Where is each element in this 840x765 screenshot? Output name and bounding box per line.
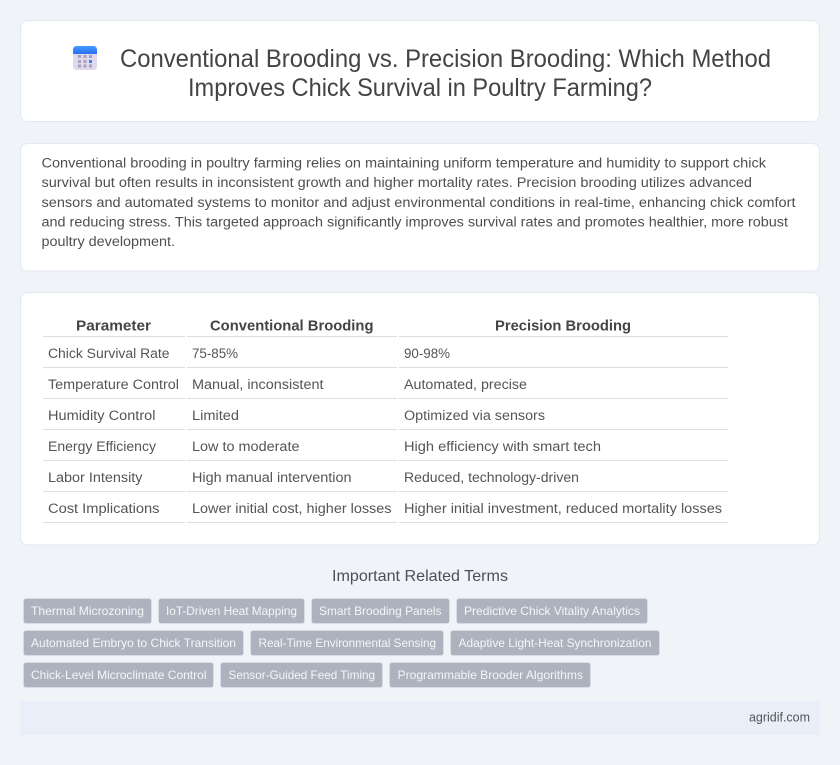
panel: introduction: [20, 144, 820, 271]
table row: energy efficiency: [48, 439, 601, 455]
text block: introduction paragraph: survival but often results in inconsistent growth and higher mortality rates. Precision brooding utilizes advanced: [42, 175, 752, 191]
panel: comparison table: [20, 292, 820, 545]
tag: smart brooding panels: [312, 598, 450, 624]
table row: cost implications: Lower initial cost, higher losses: [192, 501, 392, 517]
text block: introduction paragraph: and reducing stress. This targeted approach significantly improves survival rates and promotes healthier, more robust: [42, 214, 788, 230]
table row: energy efficiency: Low to moderate: [192, 439, 300, 455]
text block: introduction paragraph: [42, 156, 796, 250]
tag: automated embryo to chick transition: [24, 630, 244, 656]
table header: Parameter: [76, 319, 151, 335]
footer: [20, 701, 820, 735]
tag: programmable brooder algorithms: Programmable Brooder Algorithms: [398, 668, 583, 682]
tag: chick-level microclimate control: [24, 662, 214, 688]
tag: adaptive light-heat synchronization: Adaptive Light-Heat Synchronization: [458, 636, 652, 650]
table row: chick survival rate: 90-98%: [404, 346, 450, 362]
title: Conventional Brooding vs. Precision Brooding: Which Method: [120, 45, 771, 73]
table header: Precision Brooding: [495, 319, 631, 335]
tag: smart brooding panels: Smart Brooding Panels: [319, 604, 442, 618]
table row: labor intensity: Reduced, technology-driven: [404, 470, 579, 486]
table row: humidity control: Optimized via sensors: [404, 408, 545, 424]
table row: cost implications: [48, 501, 722, 517]
table row: energy efficiency: Energy Efficiency: [48, 439, 157, 455]
panel: related term tags: [24, 598, 660, 688]
tag: predictive chick vitality analytics: [456, 598, 648, 624]
tag: automated embryo to chick transition: Automated Embryo to Chick Transition: [31, 636, 236, 650]
table row: labor intensity: High manual intervention: [192, 470, 352, 486]
table row: temperature control: [48, 377, 527, 393]
text block: introduction paragraph: Conventional brooding in poultry farming relies on maintaining uniform temperature and humidity to support chick: [42, 156, 767, 172]
tag: sensor-guided feed timing: [220, 662, 382, 688]
table row: labor intensity: [48, 470, 579, 486]
tag: thermal microzoning: Thermal Microzoning: [31, 604, 144, 618]
footer: agridif.com: [749, 711, 810, 725]
icon: calendar: [73, 46, 97, 70]
tag: chick-level microclimate control: Chick-Level Microclimate Control: [31, 668, 206, 682]
table row: cost implications: Cost Implications: [48, 501, 160, 517]
table row: labor intensity: Labor Intensity: [48, 470, 143, 486]
tag: sensor-guided feed timing: Sensor-Guided Feed Timing: [228, 668, 375, 682]
table row: humidity control: [48, 408, 545, 424]
heading: important related terms: Important Related Terms: [332, 568, 508, 585]
tag: adaptive light-heat synchronization: [450, 630, 660, 656]
table row: temperature control: Automated, precise: [404, 377, 527, 393]
tag: thermal microzoning: [24, 598, 152, 624]
table header: [76, 319, 631, 335]
tag: iot-driven heat mapping: [158, 598, 304, 624]
text block: introduction paragraph: poultry development.: [42, 234, 175, 250]
tag: real-time environmental sensing: Real-Time Environmental Sensing: [258, 636, 436, 650]
table row: humidity control: Humidity Control: [48, 408, 156, 424]
title: [120, 45, 771, 102]
panel: title header: [20, 20, 820, 122]
tag: predictive chick vitality analytics: Predictive Chick Vitality Analytics: [464, 604, 640, 618]
table row: chick survival rate: 75-85%: [192, 346, 238, 362]
text block: introduction paragraph: sensors and automated systems to monitor and adjust environmental conditions in real-time, enhancing chick comfort: [42, 195, 796, 211]
table row: energy efficiency: High efficiency with smart tech: [404, 439, 601, 455]
tag: programmable brooder algorithms: [390, 662, 590, 688]
table row: temperature control: Temperature Control: [48, 377, 179, 393]
table row: chick survival rate: Chick Survival Rate: [48, 346, 170, 362]
table header: Conventional Brooding: [210, 319, 374, 335]
tag: iot-driven heat mapping: IoT-Driven Heat Mapping: [166, 604, 297, 618]
table row: chick survival rate: [48, 346, 450, 362]
table row: temperature control: Manual, inconsistent: [192, 377, 324, 393]
title: Improves Chick Survival in Poultry Farming?: [188, 74, 652, 102]
table row: cost implications: Higher initial investment, reduced mortality losses: [404, 501, 722, 517]
tag: real-time environmental sensing: [250, 630, 444, 656]
table row: humidity control: Limited: [192, 408, 239, 424]
